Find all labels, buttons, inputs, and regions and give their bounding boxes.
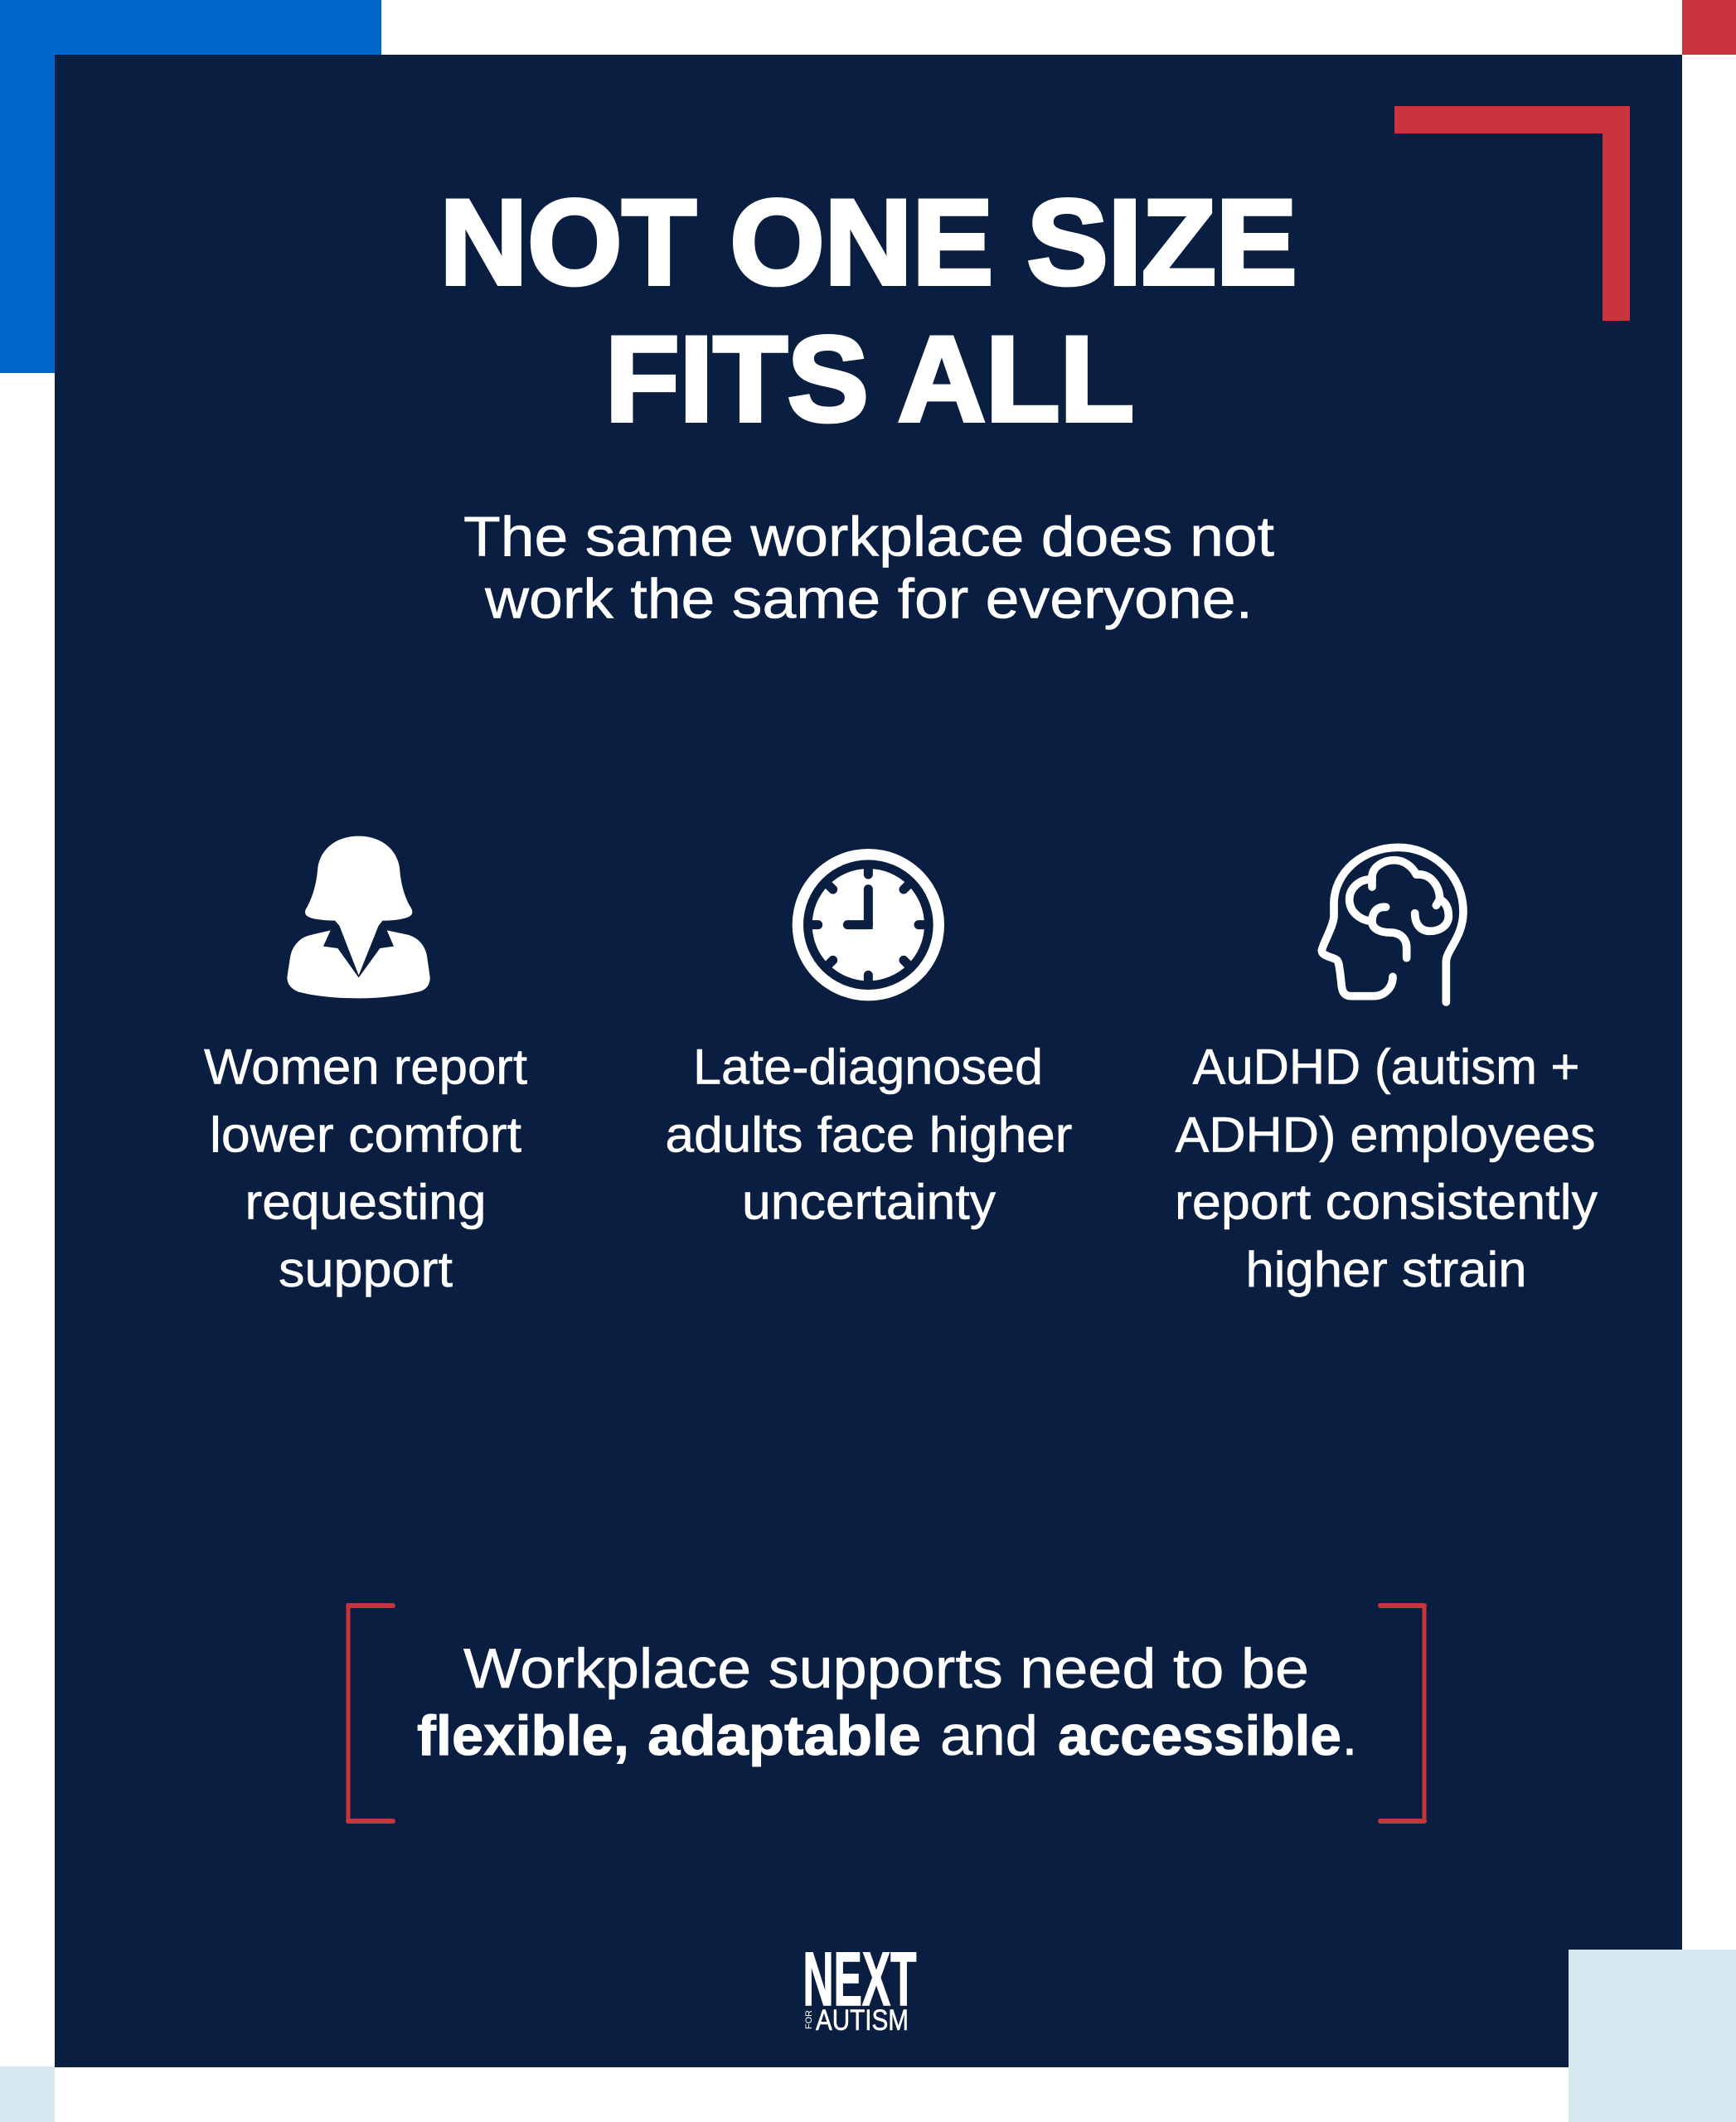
text: AuDHD employees: ADHD) employees (1176, 1107, 1595, 1162)
icon: woman (287, 836, 430, 998)
title: FITS ALL (605, 312, 1134, 446)
text: women: Women report (204, 1039, 527, 1094)
logo: Next for Autism: AUTISM (816, 2004, 909, 2037)
subtitle: work the same for everyone. (484, 567, 1253, 630)
callout text: Workplace supports need to be (463, 1637, 1309, 1700)
callout: workplace supports (348, 1606, 1424, 1821)
corner block: red top right (1682, 0, 1736, 55)
column: late-diagnosed adults (665, 849, 1073, 1230)
text: women: support (279, 1242, 453, 1297)
callout text: flexible, (417, 1704, 629, 1767)
text: AuDHD employees (1175, 1039, 1598, 1297)
text: late-diagnosed adults (665, 1039, 1073, 1230)
logo: Next for Autism (803, 1937, 917, 2037)
title: NOT ONE SIZE (439, 174, 1297, 310)
corner block: light blue bottom left (0, 2066, 55, 2122)
text: women: lower comfort (210, 1107, 521, 1162)
icon: clock (793, 849, 944, 1000)
text: late-diagnosed adults: adults face higher (665, 1107, 1073, 1162)
corner block: blue top left (0, 0, 381, 373)
text: late-diagnosed adults: Late-diagnosed (693, 1039, 1043, 1094)
text: AuDHD employees: AuDHD (autism + (1192, 1039, 1580, 1094)
left bracket (348, 1606, 393, 1821)
callout text: . (1342, 1704, 1357, 1767)
logo: Next for Autism: FOR (804, 2010, 814, 2029)
right bracket (1380, 1606, 1424, 1821)
subtitle: The same workplace does not (463, 506, 1274, 569)
logo: Next for Autism: NEXT (803, 1937, 917, 2022)
text: AuDHD employees: report consistently (1175, 1174, 1598, 1230)
title (439, 174, 1297, 446)
red corner bracket (1394, 106, 1630, 321)
text: women: requesting (245, 1174, 486, 1230)
icon: head with brain (1321, 847, 1463, 1002)
callout text: and (940, 1704, 1038, 1767)
text: late-diagnosed adults: uncertainty (742, 1174, 996, 1230)
text: women (204, 1039, 527, 1297)
subtitle (463, 506, 1274, 630)
text: AuDHD employees: higher strain (1245, 1242, 1527, 1297)
callout text: accessible (1058, 1704, 1341, 1767)
column: women (204, 836, 527, 1297)
callout text: adaptable (647, 1704, 921, 1767)
column: AuDHD employees (1175, 847, 1598, 1297)
corner block: light blue bottom right (1569, 1950, 1736, 2122)
callout text (417, 1637, 1357, 1767)
